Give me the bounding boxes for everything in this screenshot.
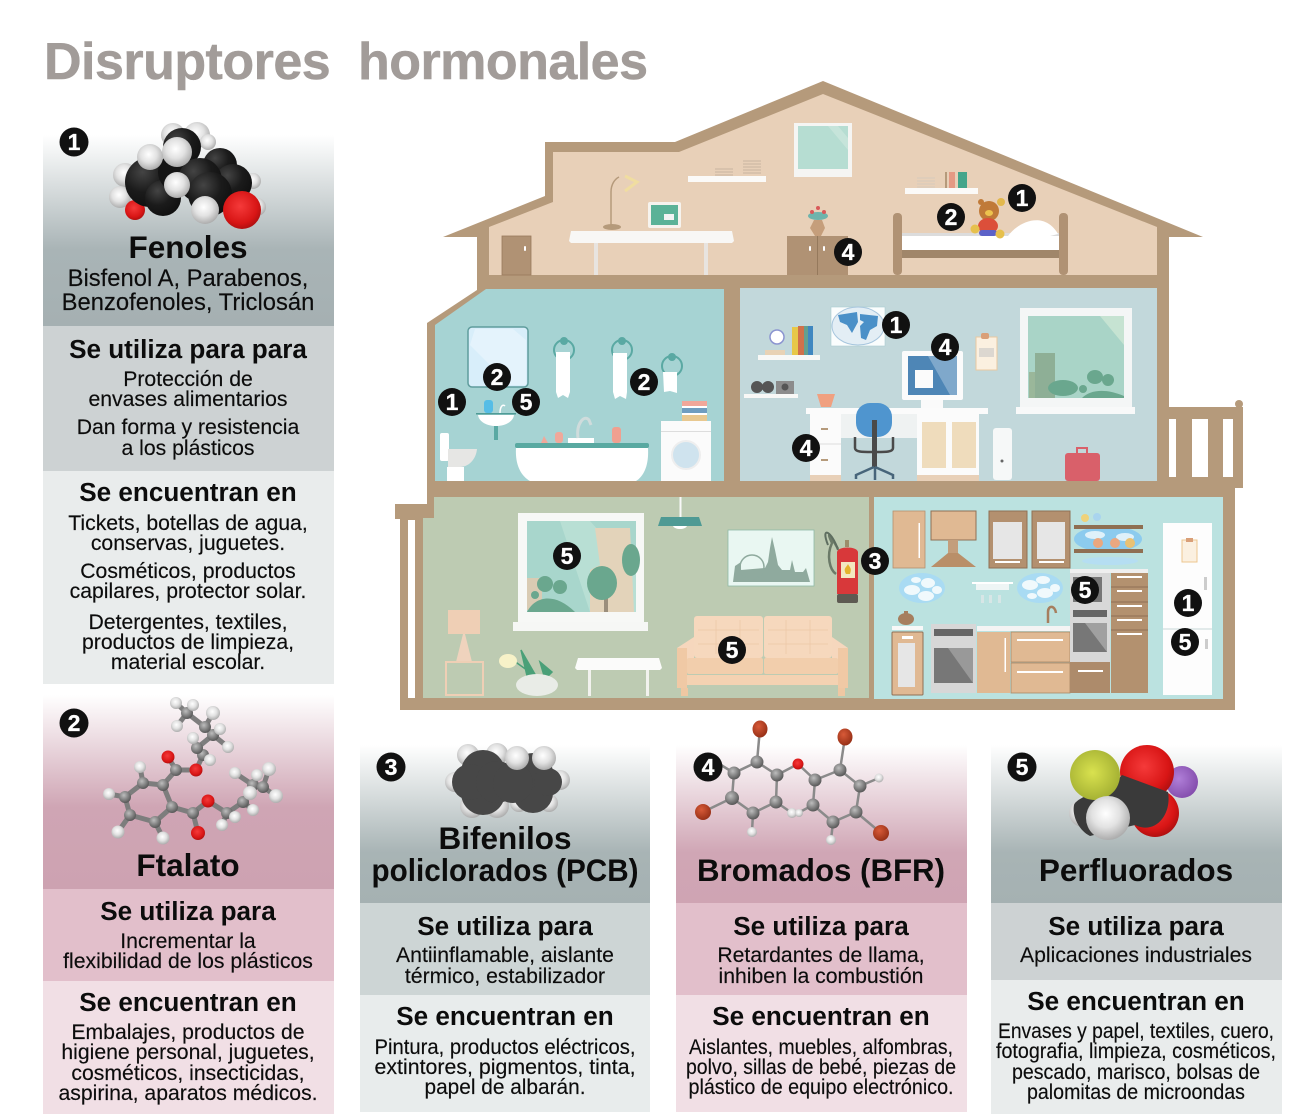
heading: perfluorados: Perfluorados <box>1039 852 1233 888</box>
room: attic <box>489 94 1157 275</box>
text: uses <box>396 944 614 988</box>
world map <box>831 307 885 346</box>
marker 4 monitor: 4 <box>939 334 952 360</box>
mirror <box>468 327 528 387</box>
text: uses: Retardantes de llama, <box>717 944 925 967</box>
shelf with clock and books <box>758 326 820 360</box>
marker 2 bedroom <box>937 203 965 231</box>
oven column <box>1070 569 1110 693</box>
text: uses: Incrementar la <box>120 930 256 953</box>
laptop <box>648 202 681 228</box>
marker 5 sofa: 5 <box>726 637 739 663</box>
glass cabinets <box>989 511 1070 568</box>
utensil rack <box>972 582 1013 603</box>
desk lamp <box>603 176 637 230</box>
title: Disruptores hormonales <box>44 33 648 91</box>
skyline picture <box>728 530 814 586</box>
text: found in: Aislantes, muebles, alfombras, <box>689 1036 953 1059</box>
teddy bear <box>970 198 1005 238</box>
text: uses: a los plásticos <box>121 437 255 460</box>
text: uses: térmico, estabilizador <box>405 965 605 988</box>
text: found in: Cosméticos, productos <box>80 560 296 583</box>
heading: fenoles: Fenoles <box>128 229 248 265</box>
text: found in: Envases y papel, textiles, cuero, <box>998 1020 1274 1043</box>
extractor hood <box>931 511 976 567</box>
kettle <box>898 611 914 625</box>
marker 1 bathroom: 1 <box>446 389 459 415</box>
marker 2 mirror <box>483 363 511 391</box>
text: found in: Embalajes, productos de <box>71 1021 305 1044</box>
text: found in: Detergentes, textiles, <box>88 611 288 634</box>
badge 4 <box>694 752 722 782</box>
badge 3: 3 <box>385 754 397 780</box>
sink <box>476 400 516 440</box>
marker 2 towels: 2 <box>638 369 650 395</box>
text: uses <box>77 368 299 460</box>
marker 4 desk: 4 <box>800 435 813 461</box>
marker 2 bedroom: 2 <box>945 204 957 230</box>
marker 1 fridge: 1 <box>1182 590 1195 616</box>
text: found in <box>374 1036 636 1099</box>
text: uses: envases alimentarios <box>88 388 288 411</box>
panel: 5 perfluorados <box>991 745 1282 1114</box>
icon: molecule ftalato <box>103 697 283 844</box>
panel: 4 bromados <box>676 720 967 1112</box>
marker 5 window <box>553 542 581 570</box>
right tile splash <box>1017 573 1063 603</box>
text: found in: plástico de equipo electrónico. <box>688 1076 954 1099</box>
marker 5 sink <box>512 388 540 416</box>
heading: found in: Se encuentran en <box>79 987 297 1017</box>
marker 2 mirror: 2 <box>491 364 503 390</box>
badge 3 <box>376 752 406 782</box>
shelves with dishes <box>1074 513 1143 565</box>
heading: uses: Se utiliza para <box>100 896 276 926</box>
subtitle <box>62 265 314 316</box>
text: found in: papel de albarán. <box>424 1076 586 1099</box>
text: found in: Tickets, botellas de agua, <box>68 512 308 535</box>
heading: found in: Se encuentran en <box>712 1001 930 1031</box>
text: uses: Antiinflamable, aislante <box>396 944 614 967</box>
marker 4 desk <box>792 434 820 462</box>
toilet <box>440 433 477 481</box>
marker 5 sink: 5 <box>520 389 533 415</box>
bathtub <box>515 418 649 481</box>
marker 4 monitor <box>931 333 959 361</box>
text: uses: Protección de <box>123 368 253 391</box>
tall drawers <box>1070 569 1148 693</box>
countertop and cabinets <box>977 626 1070 693</box>
balcony railing gaps <box>408 400 1243 698</box>
heading: ftalato: Ftalato <box>136 847 240 883</box>
stove <box>931 624 976 693</box>
text: found in: conservas, juguetes. <box>91 532 285 555</box>
text: found in <box>58 1021 318 1105</box>
panel: 1 fenoles <box>43 122 334 684</box>
room: living room <box>423 497 869 698</box>
text: uses: flexibilidad de los plásticos <box>63 950 313 973</box>
text: found in: fotografia, limpieza, cosméticos, <box>996 1040 1276 1063</box>
marker 1 bedroom: 1 <box>1016 185 1029 211</box>
text: found in: material escolar. <box>111 651 265 674</box>
heading: found in: Se encuentran en <box>396 1001 614 1031</box>
marker 5 microwave: 5 <box>1079 577 1092 603</box>
icon: molecule fenol <box>109 122 266 229</box>
flower vase <box>808 206 828 236</box>
icon: molecule pcb <box>445 743 570 818</box>
bed <box>893 213 1068 275</box>
markers: 1 to 5 on house <box>438 184 1202 664</box>
fire extinguisher <box>825 533 858 603</box>
badge 2: 2 <box>68 710 80 736</box>
badge 1 <box>60 128 88 156</box>
text: found in: palomitas de microondas <box>1027 1081 1245 1104</box>
upper cabinet <box>893 511 925 568</box>
shelf with books <box>905 172 978 194</box>
desk <box>569 231 734 275</box>
text: found in: polvo, sillas de bebé, piezas de <box>686 1056 956 1079</box>
text: found in: higiene personal, juguetes, <box>61 1041 315 1064</box>
cabinet <box>787 236 848 275</box>
marker 1 map: 1 <box>890 312 903 338</box>
text: found in: aspirina, aparatos médicos. <box>58 1082 318 1105</box>
heading: found in: Se encuentran en <box>1027 986 1245 1016</box>
text: found in <box>68 512 308 674</box>
badge 4: 4 <box>702 754 715 780</box>
left tile splash <box>899 573 945 603</box>
marker 5 freezer <box>1171 628 1199 656</box>
text: found in: capilares, protector solar. <box>70 580 306 603</box>
icon: molecule bfr <box>695 720 889 845</box>
subtitle: Benzofenoles, Triclosán <box>62 289 314 316</box>
text: uses <box>63 930 313 973</box>
monitor <box>902 351 963 408</box>
text: found in: productos de limpieza, <box>82 631 294 654</box>
coffee table <box>575 658 662 696</box>
briefcase <box>1065 448 1100 481</box>
window with garden view <box>513 513 648 631</box>
marker 5 sofa <box>718 636 746 664</box>
marker 3 extinguisher <box>861 547 889 575</box>
desk with drawers and cabinet <box>806 394 988 481</box>
ceiling lamp <box>658 497 702 529</box>
house cross-section <box>395 81 1243 710</box>
icon: molecule perfluorado <box>1069 745 1198 840</box>
marker 5 window: 5 <box>561 543 574 569</box>
shelf with stacked books <box>688 161 766 182</box>
marker 3 extinguisher: 3 <box>869 548 881 574</box>
text: found in: extintores, pigmentos, tinta, <box>374 1056 636 1079</box>
text: found in: pescado, marisco, bolsas de <box>1012 1061 1260 1084</box>
sofa <box>677 616 848 696</box>
marker 1 bedroom <box>1008 184 1036 212</box>
text: uses: inhiben la combustión <box>719 965 923 988</box>
text: found in: Pintura, productos eléctricos, <box>374 1036 636 1059</box>
marker 5 microwave <box>1071 576 1099 604</box>
heading: bromados: Bromados (BFR) <box>697 852 945 888</box>
room: bathroom <box>435 289 724 481</box>
faucet <box>1048 607 1056 623</box>
marker 2 towels <box>630 368 658 396</box>
badge 5: 5 <box>1016 754 1029 780</box>
text: found in <box>686 1036 956 1099</box>
heading: bifenilos: policlorados (PCB) <box>372 852 638 888</box>
pc tower <box>993 428 1012 480</box>
fridge <box>1163 523 1212 695</box>
badge 5 <box>1008 752 1036 782</box>
house walls and roof <box>395 81 1243 710</box>
window with city view <box>1016 308 1135 414</box>
marker 1 bathroom <box>438 388 466 416</box>
heading: bifenilos: Bifenilos <box>438 820 572 856</box>
text: uses <box>717 944 925 988</box>
towel rings <box>554 337 682 399</box>
heading: uses: Se utiliza para <box>733 911 909 941</box>
panel: 3 bifenilos <box>360 743 650 1112</box>
heading: found in: Se encuentran en <box>79 477 297 507</box>
side table with lamp <box>446 610 483 695</box>
left base cabinet <box>892 626 923 695</box>
room: kitchen <box>874 497 1223 699</box>
marker 1 fridge <box>1174 589 1202 617</box>
subtitle: Bisfenol A, Parabenos, <box>68 265 308 292</box>
office chair <box>855 403 893 480</box>
text: found in: cosméticos, insecticidas, <box>71 1062 305 1085</box>
heading: bifenilos <box>372 820 638 888</box>
heading: uses: Se utiliza para para <box>69 334 307 364</box>
clipboard <box>976 333 997 370</box>
badge 2 <box>60 708 88 738</box>
skylight window <box>794 123 852 177</box>
room: study <box>740 288 1157 481</box>
text: uses: Aplicaciones industriales <box>1020 944 1252 967</box>
washing machine <box>661 401 711 481</box>
marker 4 cabinet: 4 <box>842 239 855 265</box>
heading: uses: Se utiliza para <box>417 911 593 941</box>
badge 1: 1 <box>68 129 81 155</box>
panel: 2 ftalato <box>43 695 334 1114</box>
door left <box>502 236 531 275</box>
marker 1 map <box>882 311 910 339</box>
heading: uses: Se utiliza para <box>1048 911 1224 941</box>
text: uses: Dan forma y resistencia <box>77 416 299 439</box>
text: found in <box>996 1020 1276 1104</box>
potted plant <box>499 650 558 696</box>
shelf with binoculars and camera <box>744 381 798 398</box>
marker 4 cabinet <box>834 238 862 266</box>
marker 5 freezer: 5 <box>1179 629 1192 655</box>
